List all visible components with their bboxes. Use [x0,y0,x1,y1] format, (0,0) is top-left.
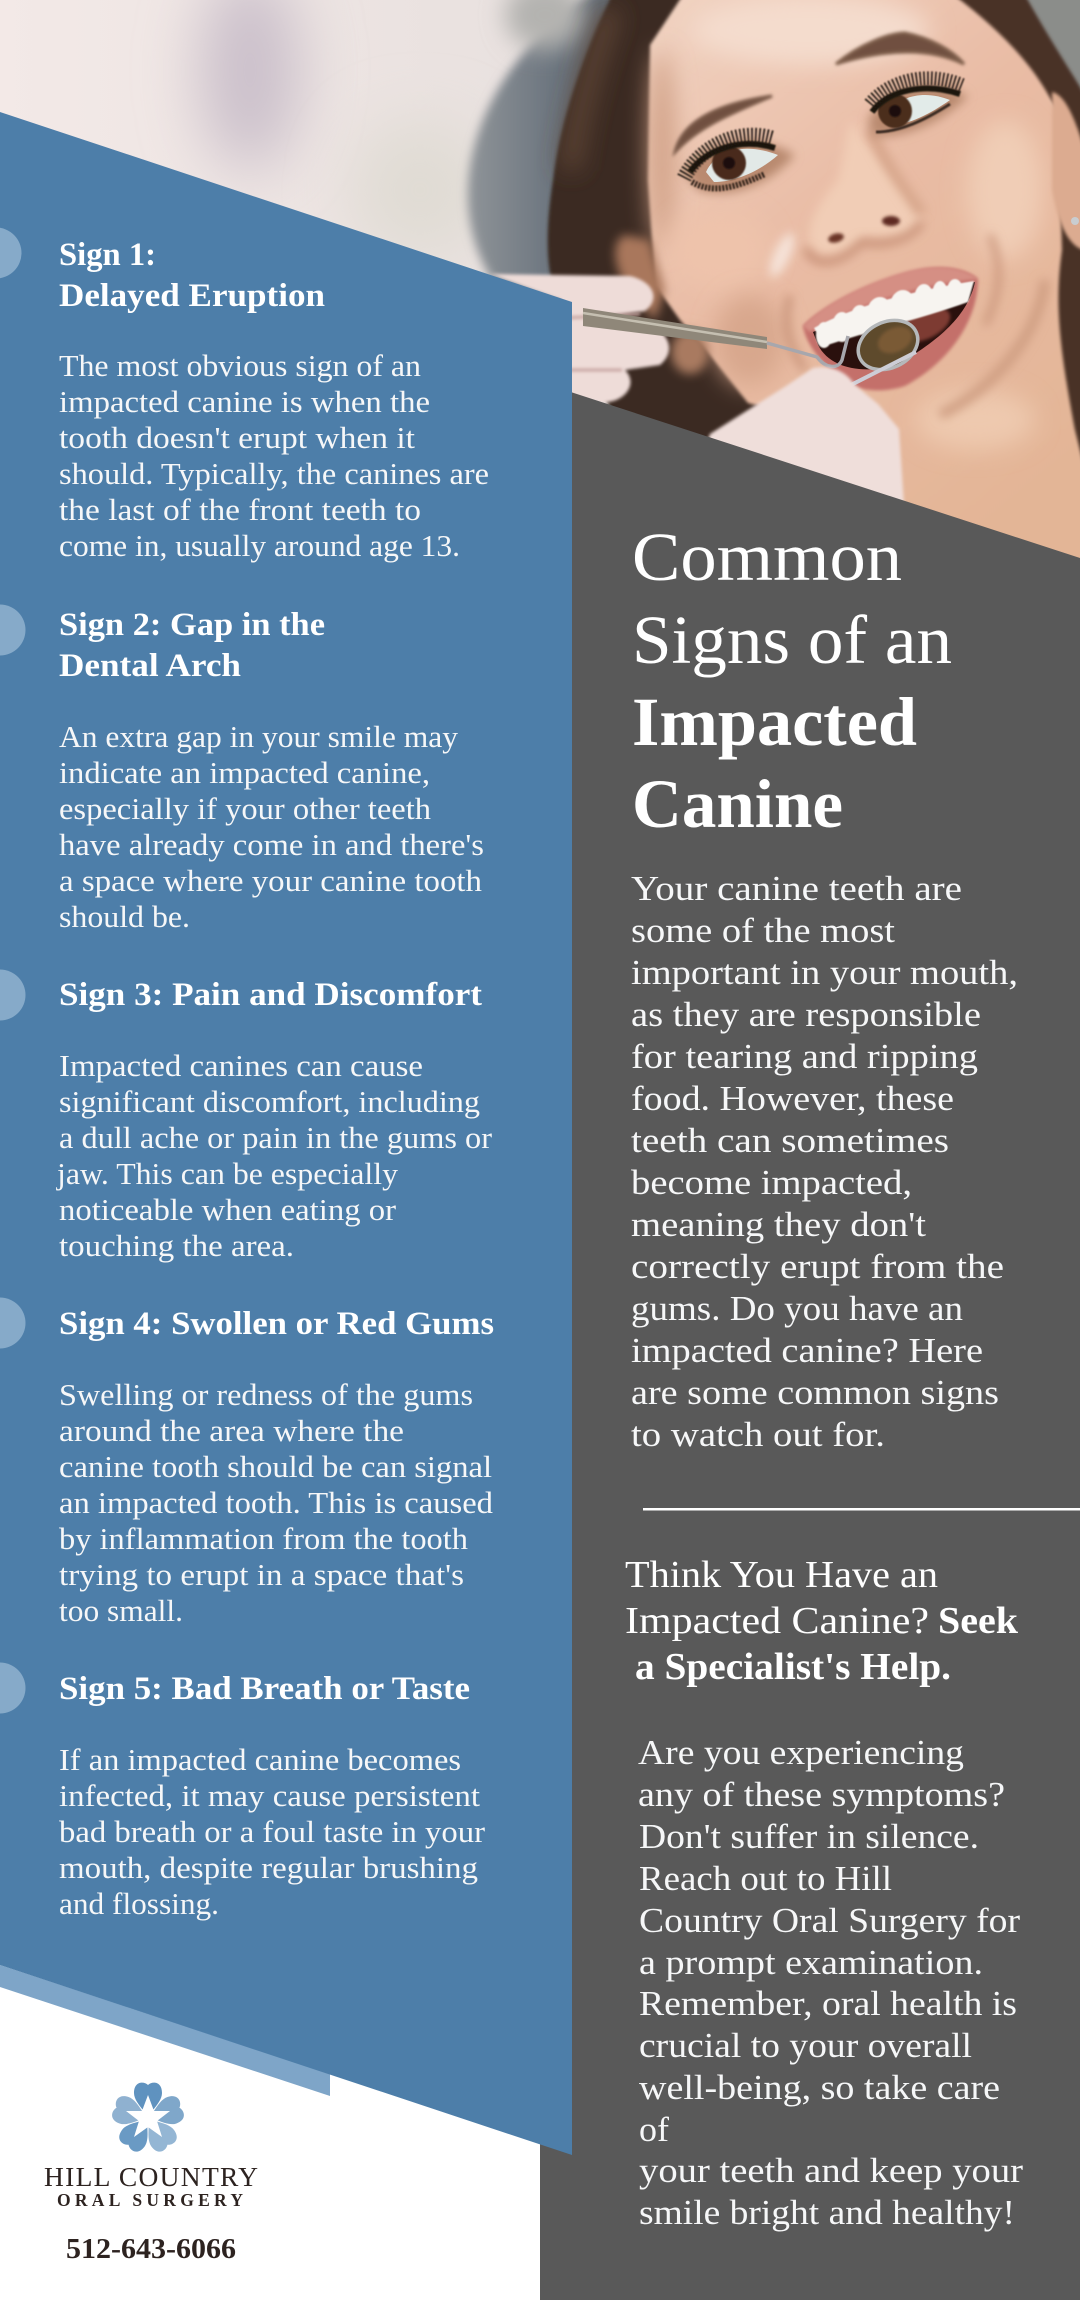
marker: sign 1 dot [0,228,22,278]
sign 1 text: impacted canine is when the [59,385,430,419]
sign 1 text: The most obvious sign of an [59,349,421,383]
sign 4 text: trying to erupt in a space that's [59,1558,464,1592]
sign 4 [59,1306,494,1628]
sign 5 text: infected, it may cause persistent [59,1779,481,1813]
sign 3 text [56,1049,492,1263]
call to action paragraph: Reach out to Hill [639,1859,892,1898]
call to action paragraph: of [639,2110,669,2149]
main title: Impacted [632,684,917,760]
sign 4 text: by inflammation from the tooth [59,1522,468,1556]
logo subline: ORAL SURGERY [57,2190,243,2210]
main title: Canine [632,766,843,842]
sign 2 [59,607,484,934]
call to action paragraph: crucial to your overall [639,2026,972,2065]
sign 2 text: An extra gap in your smile may [59,720,459,754]
sign 1 text: the last of the front teeth to [59,493,421,527]
sign 4 text [59,1378,493,1628]
sign 2 text: especially if your other teeth [59,792,431,826]
sign 2 heading [59,607,325,684]
marker: sign 3 dot [0,970,26,1020]
intro paragraph: as they are responsible [631,995,981,1034]
teeth [814,279,974,348]
intro paragraph: teeth can sometimes [631,1121,949,1160]
marker: sign 2 dot [0,604,26,656]
sign 3 text: touching the area. [59,1229,294,1263]
sign 5 heading: Sign 5: Bad Breath or Taste [59,1671,470,1707]
panel: grey intro column [540,382,1080,2300]
sign 1 heading [59,237,325,314]
intro paragraph: to watch out for. [631,1415,885,1454]
sign 4 heading: Sign 4: Swollen or Red Gums [59,1306,494,1342]
sign 1 [59,237,489,563]
sign 4 text: an impacted tooth. This is caused [59,1486,493,1520]
dental probe [583,308,767,349]
intro paragraph: for tearing and ripping [631,1037,978,1076]
marker: sign 4 dot [0,1298,26,1348]
sign 5 text [59,1743,485,1921]
sign 3 text: noticeable when eating or [59,1193,396,1227]
sign 4 text: around the area where the [59,1414,404,1448]
call to action paragraph: Don't suffer in silence. [639,1817,979,1856]
call to action paragraph: well-being, so take care [639,2068,1000,2107]
marker: sign 5 dot [0,1662,26,1714]
sign 4 text: Swelling or redness of the gums [59,1378,473,1412]
intro paragraph: impacted canine? Here [631,1331,983,1370]
sign 1 text: tooth doesn't erupt when it [59,421,416,455]
intro paragraph: become impacted, [631,1163,912,1202]
light blue accent strip [0,1965,330,2096]
right eye [868,86,968,137]
call to action paragraph: Remember, oral health is [639,1984,1017,2023]
sign 2 text [59,720,484,934]
phone number: 512-643-6066 [66,2233,236,2265]
logo: Hill Country Oral Surgery [44,2083,258,2210]
call to action paragraph [638,1733,1023,2232]
call to action heading: Impacted Canine? [625,1600,929,1642]
intro paragraph: Your canine teeth are [631,869,962,908]
main title: Common [632,519,902,595]
main title [632,519,952,842]
sign 3 heading: Sign 3: Pain and Discomfort [59,977,482,1013]
call to action paragraph: Country Oral Surgery for [639,1901,1020,1940]
call to action paragraph: a prompt examination. [639,1943,983,1982]
sign 5 [59,1671,485,1921]
intro paragraph: food. However, these [631,1079,954,1118]
sign 1 heading: Delayed Eruption [59,278,325,314]
sign 2 text: should be. [59,900,190,934]
photo: patient at dentist [0,0,1080,600]
logo wordmark: HILL COUNTRY [44,2161,258,2192]
face [648,0,1080,600]
call to action heading: Seek [938,1600,1019,1642]
intro paragraph: meaning they don't [631,1205,926,1244]
main title: Signs of an [632,602,952,678]
intro paragraph: are some common signs [631,1373,999,1412]
right ear [1052,92,1080,250]
call to action paragraph: any of these symptoms? [638,1775,1005,1814]
left eye [684,141,795,193]
sign 5 text: mouth, despite regular brushing [59,1851,478,1885]
icon: tooth flower [110,2083,186,2155]
dental mirror [847,311,926,387]
sign 2 heading: Dental Arch [59,648,241,684]
sign 1 text: should. Typically, the canines are [59,457,489,491]
call to action paragraph: Are you experiencing [638,1733,964,1772]
intro paragraph: important in your mouth, [631,953,1018,992]
sign 5 text: bad breath or a foul taste in your [59,1815,485,1849]
nose and cheek shading [809,120,920,256]
mouth [803,268,978,390]
sign 1 heading: Sign 1: [59,237,156,273]
call to action paragraph: your teeth and keep your [639,2151,1023,2190]
sign 2 heading: Sign 2: Gap in the [59,607,325,643]
intro paragraph: correctly erupt from the [631,1247,1004,1286]
sign 3 text: a dull ache or pain in the gums or [59,1121,492,1155]
top hand glove [490,274,669,402]
sign 4 text: canine tooth should be can signal [59,1450,492,1484]
sign 3 [56,977,492,1263]
call to action heading: a Specialist's Help. [635,1646,951,1688]
sign 1 text: come in, usually around age 13. [59,529,460,563]
sign 5 text: and flossing. [59,1887,219,1921]
intro paragraph: gums. Do you have an [631,1289,963,1328]
call to action paragraph: smile bright and healthy! [639,2193,1015,2232]
sign 3 text: Impacted canines can cause [59,1049,423,1083]
sign 3 text: significant discomfort, including [59,1085,480,1119]
sign 2 text: have already come in and there's [59,828,484,862]
sign 1 text [59,349,489,563]
eyebrows [675,96,772,152]
call to action heading: Think You Have an [625,1554,938,1596]
sign 2 text: a space where your canine tooth [59,864,482,898]
intro paragraph [631,869,1018,1454]
intro paragraph: some of the most [631,911,895,950]
sign 4 text: too small. [59,1594,183,1628]
sign 2 text: indicate an impacted canine, [59,756,430,790]
sign 5 text: If an impacted canine becomes [59,1743,461,1777]
sign 3 text: jaw. This can be especially [56,1157,399,1191]
bottom hand glove [700,367,905,520]
left ear [615,235,665,320]
call to action heading [625,1554,1019,1688]
panel: blue signs column [0,112,572,2155]
